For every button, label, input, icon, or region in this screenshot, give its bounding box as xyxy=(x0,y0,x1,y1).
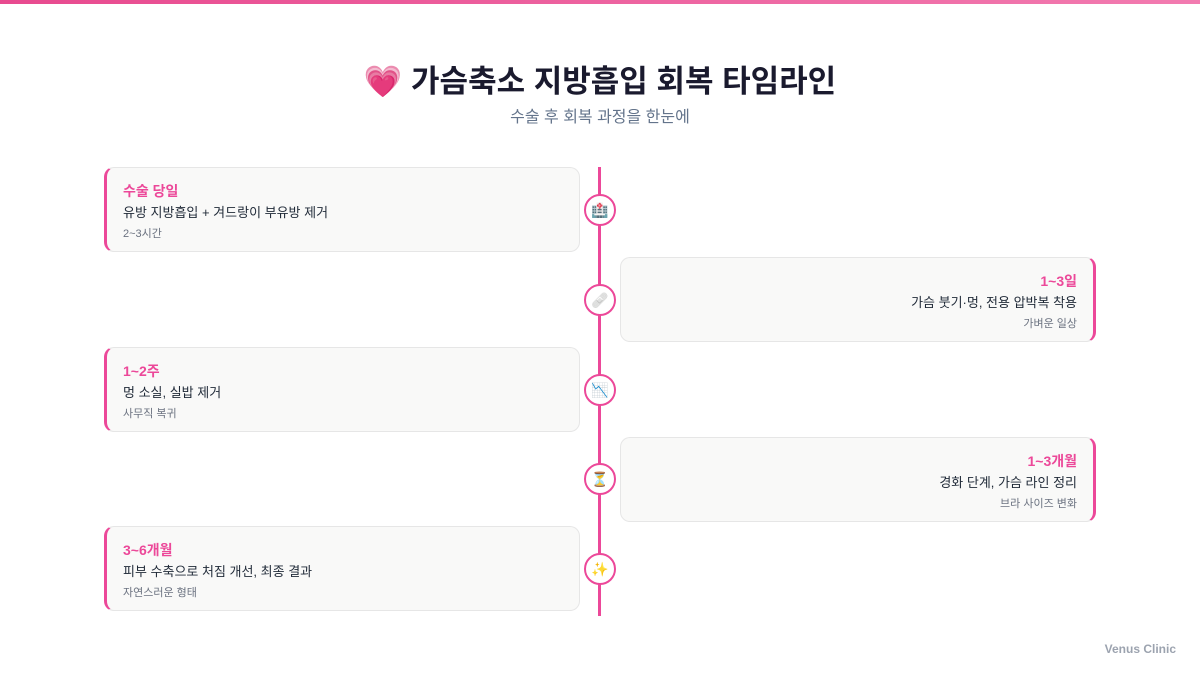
icon: hourglass: ⏳ xyxy=(591,470,609,486)
card: 1-2 weeks: 사무직 복귀 xyxy=(123,408,177,420)
timeline line xyxy=(598,167,601,616)
icon: chart down: 📉 xyxy=(591,382,609,398)
icon: bandage xyxy=(584,284,616,316)
card: 1-3 months: 1~3개월 xyxy=(1027,453,1077,469)
card: day of surgery: 유방 지방흡입 + 겨드랑이 부유방 제거 xyxy=(123,205,328,220)
card: 1-3 days: 가슴 붓기·멍, 전용 압박복 착용 xyxy=(911,295,1077,310)
title: 💗 가슴축소 지방흡입 회복 타임라인 xyxy=(364,64,836,99)
icon: hospital: 🏥 xyxy=(591,202,609,218)
card: 1-3 days xyxy=(620,257,1096,342)
card: day of surgery: 2~3시간 xyxy=(123,228,162,240)
icon: chart down xyxy=(584,374,616,406)
card: 3-6 months: 자연스러운 형태 xyxy=(123,587,197,599)
card: day of surgery xyxy=(104,167,580,252)
card: 1-3 days: 1~3일 xyxy=(1040,273,1077,289)
card: 1-3 months: 브라 사이즈 변화 xyxy=(1000,498,1077,510)
icon: hourglass xyxy=(584,463,616,495)
icon: bandage: 🩹 xyxy=(591,292,609,308)
card: 1-2 weeks: 멍 소실, 실밥 제거 xyxy=(123,385,221,400)
card: 1-2 weeks: 1~2주 xyxy=(123,363,160,379)
icon: sparkles xyxy=(584,553,616,585)
card: 3-6 months xyxy=(104,526,580,611)
subtitle: 수술 후 회복 과정을 한눈에 xyxy=(510,109,690,126)
card: 1-2 weeks xyxy=(104,347,580,432)
icon: sparkles: ✨ xyxy=(591,560,609,576)
card: day of surgery: 수술 당일 xyxy=(123,183,178,199)
footer: Venus Clinic xyxy=(1105,642,1176,656)
card: 3-6 months: 3~6개월 xyxy=(123,542,173,558)
icon: hospital xyxy=(584,194,616,226)
card: 3-6 months: 피부 수축으로 처짐 개선, 최종 결과 xyxy=(123,564,312,579)
card: 1-3 months: 경화 단계, 가슴 라인 정리 xyxy=(939,475,1077,490)
card: 1-3 days: 가벼운 일상 xyxy=(1023,318,1077,330)
card: 1-3 months xyxy=(620,437,1096,522)
